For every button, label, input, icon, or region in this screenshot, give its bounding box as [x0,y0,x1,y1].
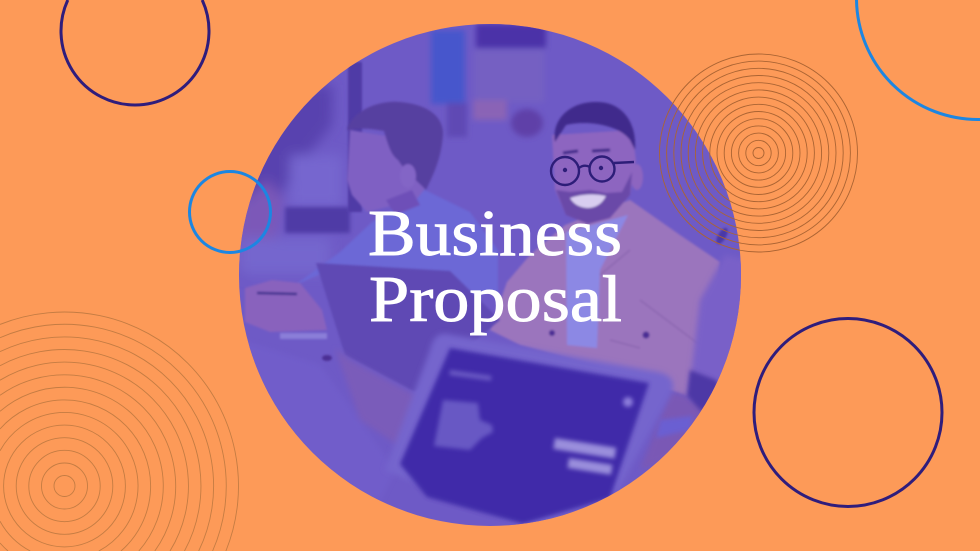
table and right figure [240,255,745,500]
dark door post [348,62,362,212]
outline circle: bottom right navy [754,318,942,506]
concentric rings: top right [660,54,858,252]
man on the left [295,102,498,300]
title: Business [368,197,622,270]
outline circle: top right blue [856,0,980,120]
hands and pen on the left [245,280,332,361]
concentric rings: bottom left [0,312,238,551]
outline circle: top left navy [61,0,209,105]
small dark spot near the shoulder [716,228,728,244]
title: Proposal [369,263,622,336]
laptop [316,263,500,392]
blurred office background [238,85,342,280]
photo circle: team at a table with purple overlay [238,24,745,530]
glasses [551,156,634,185]
title [368,197,622,336]
poster on the wall [431,24,546,137]
outline circle: small blue [190,172,270,252]
man on the right [490,102,720,398]
tablet in the foreground [385,334,673,530]
